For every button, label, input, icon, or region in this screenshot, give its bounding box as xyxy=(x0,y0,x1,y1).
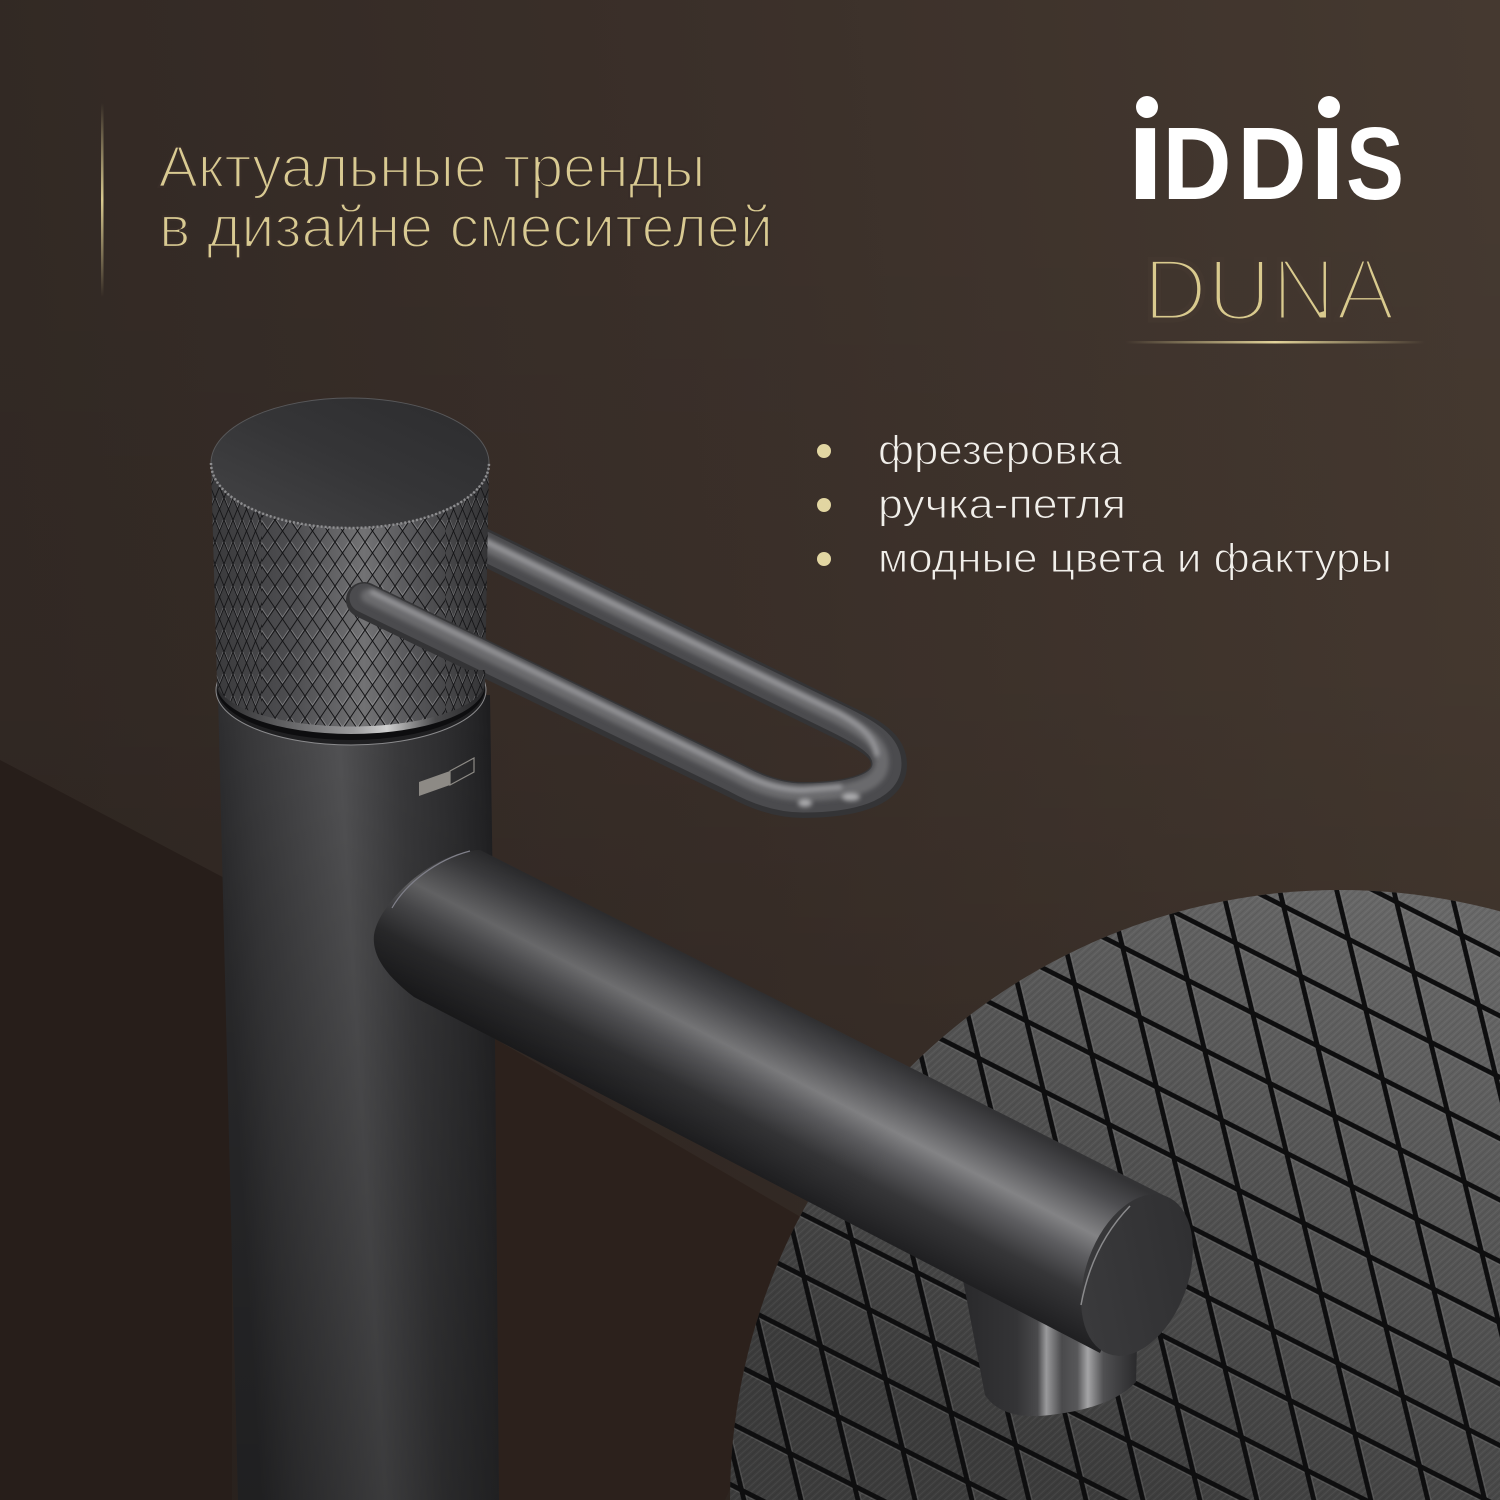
spout rim highlight xyxy=(392,851,470,908)
indicator mark xyxy=(419,758,474,796)
bullet 3: модные цвета и фактуры xyxy=(878,535,1392,581)
logo IDDIS: D xyxy=(1238,106,1306,221)
spout xyxy=(374,850,1214,1371)
logo IDDIS: D xyxy=(1162,106,1232,221)
knurled handle cylinder xyxy=(205,395,495,745)
dark counter surface xyxy=(0,760,840,1500)
title: в дизайне смесителей xyxy=(159,195,773,260)
logo IDDIS: S xyxy=(1346,106,1404,221)
bullet 1: фрезеровка xyxy=(878,427,1122,473)
nozzle xyxy=(963,1280,1137,1416)
lower handle arm xyxy=(346,582,486,670)
logo IDDIS xyxy=(1127,96,1404,221)
title: Актуальные тренды xyxy=(158,135,706,200)
handle bend highlights xyxy=(798,793,860,807)
logo IDDIS: I xyxy=(1127,106,1164,221)
accent vertical line xyxy=(101,103,104,297)
top disc xyxy=(211,398,489,528)
accent horizontal line xyxy=(1125,341,1425,344)
title xyxy=(158,135,773,260)
feature list xyxy=(817,427,1392,581)
bullet 2: ручка-петля xyxy=(878,481,1126,527)
decorative texture circle xyxy=(720,880,1500,1500)
loop handle xyxy=(364,538,889,807)
series name DUNA: DUNA xyxy=(1143,240,1395,339)
spout end cap xyxy=(1060,1179,1214,1371)
logo IDDIS: I xyxy=(1309,106,1346,221)
faucet body xyxy=(218,695,499,1500)
